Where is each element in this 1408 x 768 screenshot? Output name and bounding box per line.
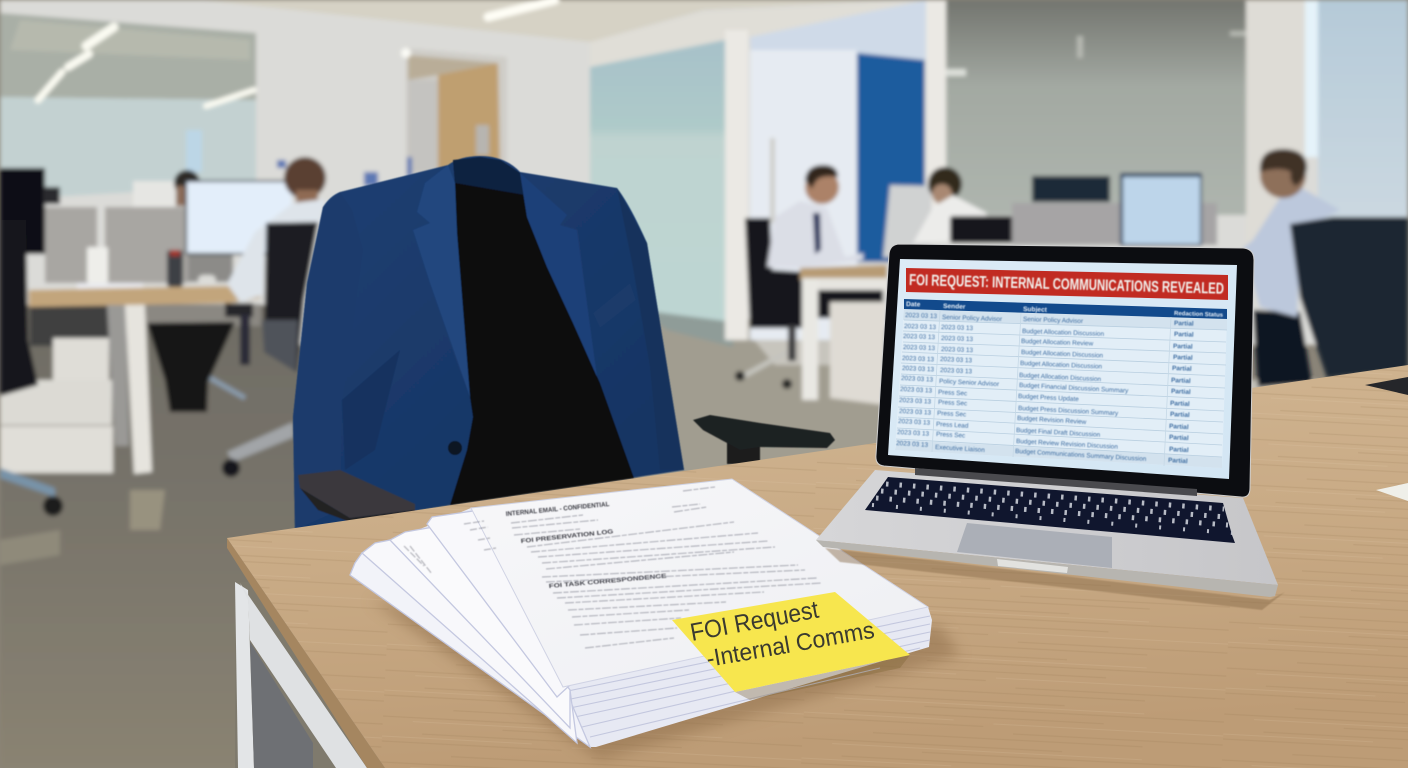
table rows: Senior Policy Advisor <box>1023 316 1084 325</box>
table rows: Press Sec <box>937 410 967 419</box>
table rows: Partial <box>1173 354 1193 362</box>
under desk shadow <box>30 306 145 346</box>
table rows: 2023 03 13 <box>896 440 929 449</box>
table rows: 2023 03 13 <box>941 324 974 332</box>
table rows: Budget Allocation Discussion <box>1020 360 1103 371</box>
laptop notch <box>997 559 1068 573</box>
body lines <box>511 487 822 648</box>
paper on right edge <box>1376 483 1408 501</box>
table rows: Budget Financial Discussion Summary <box>1019 382 1129 395</box>
table header: Sender <box>943 303 966 311</box>
table rows: Partial <box>1174 320 1194 328</box>
desk items <box>77 247 216 293</box>
section heading: FOI PRESERVATION LOG <box>521 529 614 545</box>
sticky note <box>672 592 910 700</box>
table rows: Executive Liaison <box>935 444 985 454</box>
left chair arm <box>298 470 415 522</box>
ceiling lights <box>488 0 930 92</box>
table rows: 2023 03 13 <box>899 397 932 406</box>
under desk panel <box>146 304 261 326</box>
partition <box>1012 203 1217 245</box>
screen banner <box>906 268 1228 300</box>
right glass partition <box>946 0 1246 215</box>
jacket silhouette <box>293 156 684 530</box>
desktop surface <box>227 365 1408 768</box>
central workstation <box>735 165 1217 405</box>
stack thickness lines <box>563 616 930 737</box>
table rows: Partial <box>1169 446 1189 454</box>
navy jacket on chair <box>293 156 684 530</box>
table rows: 2023 03 13 <box>904 323 937 331</box>
collar <box>453 157 525 195</box>
table rows: 2023 03 13 <box>900 386 933 395</box>
table rows: Partial <box>1172 365 1192 373</box>
table rows: Partial <box>1173 343 1193 351</box>
table rows: Budget Revision Review <box>1017 415 1087 426</box>
table rows: Budget Allocation Review <box>1021 338 1094 348</box>
desk <box>29 286 260 307</box>
fanned sheet 5 <box>350 545 590 747</box>
table rows: Partial <box>1174 331 1194 339</box>
document heading: INTERNAL EMAIL - CONFIDENTIAL <box>506 501 610 518</box>
desk <box>800 265 887 405</box>
colleague in white <box>913 167 987 243</box>
laptop base <box>816 470 1278 585</box>
table rows: 2023 03 13 <box>898 418 931 427</box>
table header: Redaction Status <box>1174 311 1224 319</box>
dark monitor <box>1032 176 1110 202</box>
table rows: Budget Allocation Discussion <box>1019 372 1102 383</box>
sticky note text line one: FOI Request <box>688 596 821 647</box>
table rows: Budget Press Discussion Summary <box>1018 405 1119 417</box>
table rows: Budget Allocation Discussion <box>1022 328 1105 338</box>
far left monitor <box>0 168 60 254</box>
table rows: 2023 03 13 <box>902 355 935 363</box>
right foreground chair <box>1290 217 1408 378</box>
table rows: Partial <box>1169 423 1189 431</box>
communications table <box>895 299 1227 468</box>
desk side frame <box>235 582 370 768</box>
table rows: Budget Allocation Discussion <box>1021 349 1104 360</box>
right lapel <box>520 173 601 386</box>
drawers <box>0 338 113 473</box>
keyboard <box>865 477 1235 543</box>
laptop lid bezel <box>876 244 1254 497</box>
desk legs <box>107 305 152 474</box>
table rows: 2023 03 13 <box>905 312 938 320</box>
table rows: 2023 03 13 <box>902 365 935 373</box>
pillars <box>725 0 1306 340</box>
far right glass <box>1305 0 1408 220</box>
office chair <box>210 222 318 477</box>
seated colleague legs <box>147 322 235 412</box>
table rows: Policy Senior Advisor <box>939 378 1000 388</box>
table rows: Budget Press Update <box>1018 393 1079 403</box>
table rows: Partial <box>1170 411 1190 419</box>
table rows: Partial <box>1171 388 1191 396</box>
table rows: Press Lead <box>936 421 969 430</box>
document stack <box>350 479 960 760</box>
right sleeve <box>617 188 684 470</box>
table rows: 2023 03 13 <box>940 367 973 375</box>
fanned sheet 2 <box>427 510 570 697</box>
table rows <box>896 312 1194 465</box>
partitions <box>45 207 188 283</box>
table rows: 2023 03 13 <box>941 335 974 343</box>
banner title: FOI REQUEST: INTERNAL COMMUNICATIONS REVEALED <box>909 272 1224 298</box>
central glass partition <box>590 40 733 347</box>
trackpad <box>957 523 1112 568</box>
background colleague <box>133 170 200 207</box>
section heading two: FOI TASK CORRESPONDENCE <box>549 574 667 590</box>
table text <box>896 301 1224 465</box>
table rows: Budget Final Draft Discussion <box>1016 427 1101 439</box>
monitor <box>185 180 292 282</box>
device on right edge <box>1365 377 1408 395</box>
table rows: 2023 03 13 <box>901 375 934 384</box>
table rows: Partial <box>1170 400 1190 408</box>
stack shadow <box>370 600 960 760</box>
table rows: Press Sec <box>936 431 966 440</box>
floor <box>0 305 300 768</box>
black inner lining <box>450 160 634 505</box>
document text <box>404 487 822 648</box>
pocket flap <box>593 283 636 328</box>
table rows: 2023 03 13 <box>941 346 974 354</box>
table rows: Partial <box>1168 457 1188 465</box>
table rows: Partial <box>1171 377 1191 385</box>
left lapel <box>413 165 470 397</box>
table rows: Senior Policy Advisor <box>942 314 1003 323</box>
desk edge <box>227 538 385 768</box>
laptop hinge <box>915 468 1197 496</box>
sticky note text line two: -Internal Comms <box>704 617 876 673</box>
fanned sheet 4 <box>362 535 577 743</box>
laptop <box>816 244 1285 610</box>
table rows: Press Sec <box>938 399 968 408</box>
table rows: 2023 03 13 <box>903 344 936 352</box>
stack body <box>350 479 932 747</box>
colleague in tie <box>767 165 863 268</box>
left panel shading <box>342 350 400 470</box>
doorway <box>401 48 507 176</box>
left workstation <box>0 157 326 516</box>
top sheet <box>471 479 928 687</box>
laptop screen <box>888 259 1237 479</box>
fanned sheet 3 <box>390 525 570 728</box>
blue feature wall room <box>750 0 926 340</box>
left sleeve <box>293 192 363 530</box>
wall signs <box>277 157 412 186</box>
table rows: Budget Communications Summary Discussion <box>1015 448 1147 463</box>
bright monitor <box>1120 173 1202 246</box>
table rows: Partial <box>1169 434 1189 442</box>
table rows: 2023 03 13 <box>903 333 936 341</box>
wood grain <box>227 365 1408 768</box>
left foreground chair <box>0 220 63 516</box>
jacket button <box>448 441 462 455</box>
table rows: 2023 03 13 <box>899 408 932 417</box>
table header: Date <box>906 301 921 309</box>
table rows: 2023 03 13 <box>897 429 930 438</box>
table rows: 2023 03 13 <box>940 356 973 364</box>
table rows: Budget Review Revision Discussion <box>1016 438 1119 451</box>
desk <box>227 365 1408 768</box>
laptop shadow <box>825 548 1285 610</box>
dark chair back <box>950 216 1013 243</box>
table header <box>906 301 1224 319</box>
monitor <box>883 185 932 258</box>
chair arm right <box>693 415 835 464</box>
right colleague <box>1243 149 1340 400</box>
back sheet lines <box>404 521 496 574</box>
table rows: Press Sec <box>938 389 968 398</box>
left glass room <box>0 13 256 200</box>
table header: Subject <box>1023 306 1048 314</box>
colleague <box>227 157 326 302</box>
chair <box>735 218 803 389</box>
laptop front edge <box>816 540 1278 597</box>
ceiling and walls <box>0 0 1408 345</box>
